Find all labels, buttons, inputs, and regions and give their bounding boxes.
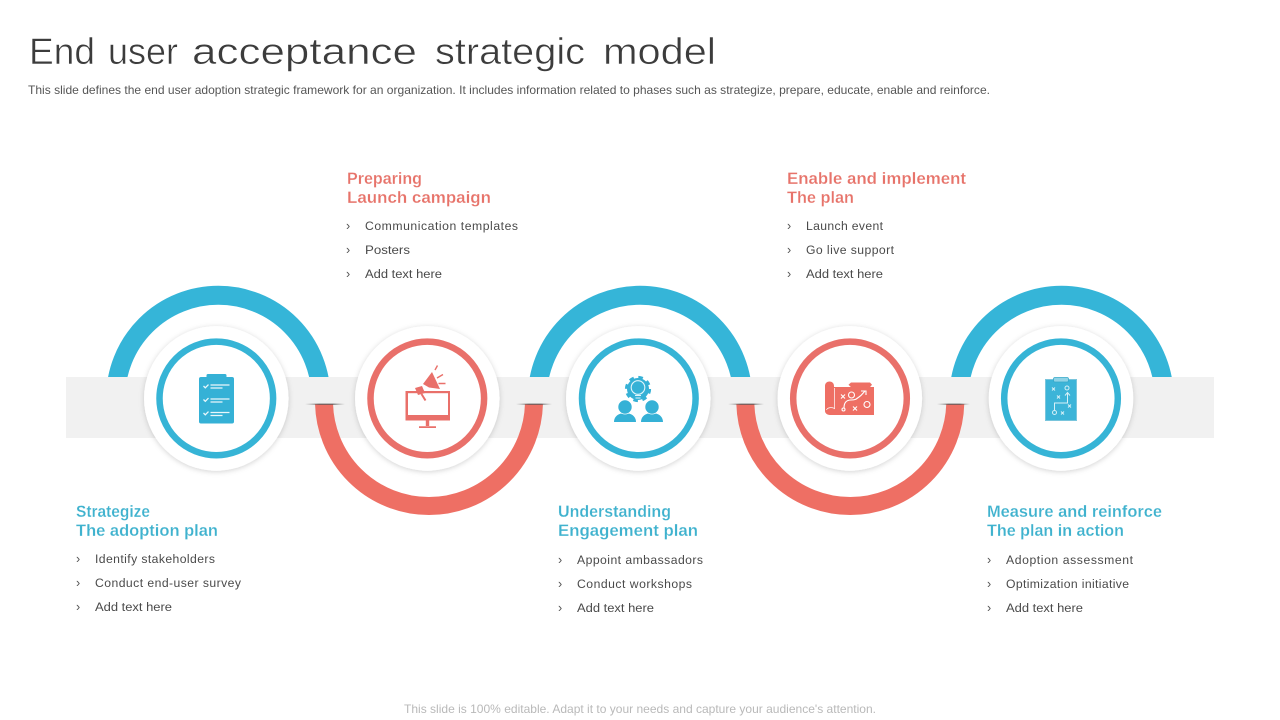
coral arc 2 <box>736 404 964 515</box>
text block: enable: Add text here <box>806 267 883 281</box>
text block: strategize: Identify stakeholders <box>95 552 215 566</box>
text block: understanding: Understanding <box>558 503 671 521</box>
text block: measure: › <box>987 577 991 591</box>
text block: enable: › <box>787 243 791 257</box>
text block: strategize <box>76 503 242 614</box>
text block: preparing: › <box>346 219 350 233</box>
icon: tactics clipboard <box>1046 378 1076 420</box>
title: End <box>29 30 95 72</box>
text block: measure: Measure and reinforce <box>987 503 1162 521</box>
text block: understanding: › <box>558 601 562 615</box>
text block: measure: Adoption assessment <box>1006 553 1134 567</box>
text block: strategize: Strategize <box>76 503 150 521</box>
text block: understanding: › <box>558 577 562 591</box>
text block: strategize: › <box>76 600 80 614</box>
text block: measure: Add text here <box>1006 601 1083 615</box>
text block: enable: Launch event <box>806 219 884 233</box>
text block: strategize: Conduct end-user survey <box>95 576 242 590</box>
blue arc 3 <box>951 286 1172 377</box>
coral arc 1 <box>315 404 543 515</box>
text block: strategize: The adoption plan <box>76 522 218 540</box>
icon: megaphone and monitor <box>406 366 450 428</box>
text block: preparing: Add text here <box>365 267 442 281</box>
icon: checklist clipboard <box>199 374 234 424</box>
title <box>29 30 716 72</box>
node 5: measure <box>989 326 1133 471</box>
node 1: strategize <box>144 326 289 471</box>
text block: understanding: Appoint ambassadors <box>577 553 703 567</box>
node 4: enable <box>778 326 922 471</box>
text block: strategize: › <box>76 576 80 590</box>
text block: enable <box>787 170 967 281</box>
node 3: understanding <box>566 326 711 471</box>
text block: understanding: Add text here <box>577 601 654 615</box>
text block: measure: The plan in action <box>987 522 1124 540</box>
text block: preparing <box>346 170 518 281</box>
icon: plan map <box>825 382 874 415</box>
text block: understanding <box>558 503 703 615</box>
text block: enable: The plan <box>787 189 854 207</box>
footer note: This slide is 100% editable. Adapt it to your needs and capture your audience's attention. <box>404 702 876 716</box>
fold shadows <box>305 404 970 405</box>
subtitle: This slide defines the end user adoption strategic framework for an organization. It includes information related to phases such as strategize, prepare, educate, enable and reinforce. <box>28 83 990 97</box>
text block: preparing: Preparing <box>347 170 422 188</box>
title: user <box>108 30 178 72</box>
text block: measure: Optimization initiative <box>1006 577 1129 591</box>
text block: understanding: › <box>558 553 562 567</box>
text block: enable: › <box>787 267 791 281</box>
text block: strategize: › <box>76 552 80 566</box>
text block: understanding: Conduct workshops <box>577 577 692 591</box>
text block: preparing: Posters <box>365 243 410 257</box>
text block: enable: Enable and implement <box>787 170 967 188</box>
text block: measure <box>987 503 1162 615</box>
icon: people and idea gear <box>614 378 663 422</box>
text block: enable: Go live support <box>806 243 895 257</box>
text block: preparing: Launch campaign <box>347 189 491 207</box>
text block: preparing: › <box>346 243 350 257</box>
text block: understanding: Engagement plan <box>558 522 698 540</box>
title: acceptance <box>192 30 417 72</box>
node 2: preparing <box>355 326 500 471</box>
title: model <box>603 30 716 72</box>
text block: preparing: › <box>346 267 350 281</box>
title: strategic <box>435 30 585 72</box>
text block: measure: › <box>987 553 991 567</box>
text block: strategize: Add text here <box>95 600 172 614</box>
background band <box>66 377 1214 438</box>
text block: measure: › <box>987 601 991 615</box>
blue arc 2 <box>530 286 750 377</box>
text block: enable: › <box>787 219 791 233</box>
blue arc 1 <box>108 286 328 377</box>
text block: preparing: Communication templates <box>365 219 518 233</box>
